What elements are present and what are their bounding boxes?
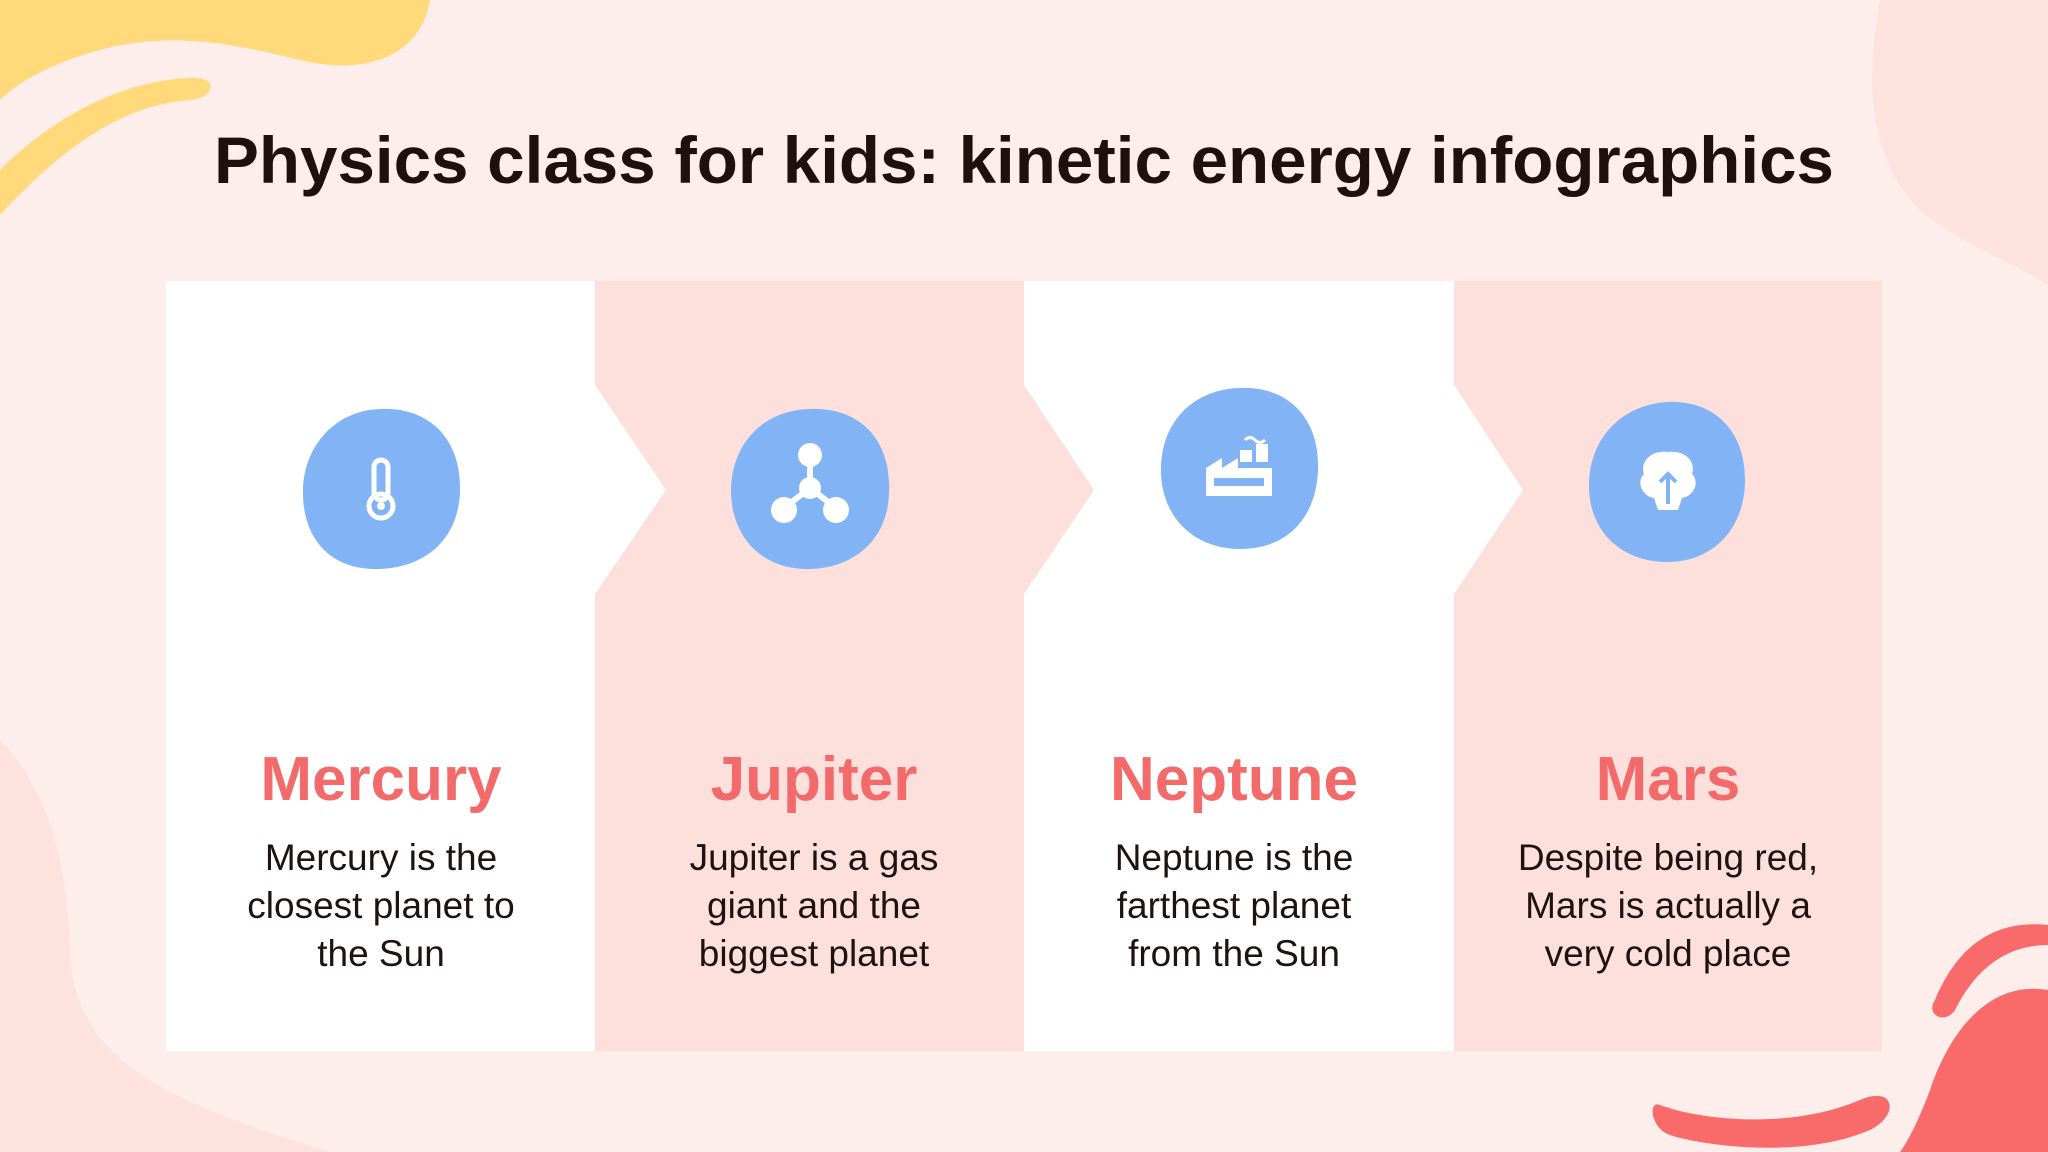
text block: Jupiter: Jupiter xyxy=(711,745,917,814)
text block: Mars: Mars xyxy=(1596,745,1740,814)
panel: Mercury background xyxy=(166,281,595,1051)
text block: Mercury: Mercury xyxy=(260,745,502,814)
icon: thermometer xyxy=(303,409,460,569)
text block: Jupiter: giant and the xyxy=(707,885,921,926)
panel: Mars background xyxy=(1454,281,1882,1051)
text block: Neptune: Neptune xyxy=(1110,745,1358,814)
arrow: Neptune to Mars xyxy=(1454,385,1523,594)
decorative blob: bottom left light xyxy=(0,740,330,1152)
panel: Jupiter background xyxy=(595,281,1024,1051)
text block: Mercury: closest planet to xyxy=(247,885,515,926)
icon: factory xyxy=(1161,388,1318,549)
text block: Mars: Mars is actually a xyxy=(1525,885,1811,926)
text block: Jupiter xyxy=(690,745,938,974)
text block: Mars: very cold place xyxy=(1545,933,1791,974)
panels row xyxy=(166,281,1882,1051)
text block: Mars: Despite being red, xyxy=(1518,837,1818,878)
text block: Mercury: Mercury is the xyxy=(265,837,497,878)
arrow: Mercury to Jupiter xyxy=(595,385,666,594)
decorative blob: red bottom right xyxy=(1653,924,2048,1152)
text block: Mercury xyxy=(247,745,515,974)
text block: Neptune xyxy=(1110,745,1358,974)
panel: Neptune background xyxy=(1024,281,1454,1051)
text block: Neptune: Neptune is the xyxy=(1115,837,1353,878)
decorative blob: top right light xyxy=(1872,0,2048,285)
text block: Jupiter: Jupiter is a gas xyxy=(690,837,938,878)
icon: brain bulb xyxy=(1589,402,1745,562)
arrow: Jupiter to Neptune xyxy=(1024,385,1094,594)
icon: molecule xyxy=(731,409,889,569)
text block: Jupiter: biggest planet xyxy=(699,933,930,974)
title: Physics class for kids: kinetic energy infographics xyxy=(214,123,1834,197)
text block: Neptune: farthest planet xyxy=(1117,885,1352,926)
text block: Mars xyxy=(1518,745,1818,974)
text block: Neptune: from the Sun xyxy=(1128,933,1340,974)
text block: Mercury: the Sun xyxy=(317,933,445,974)
decorative blob: yellow top left xyxy=(0,0,430,215)
